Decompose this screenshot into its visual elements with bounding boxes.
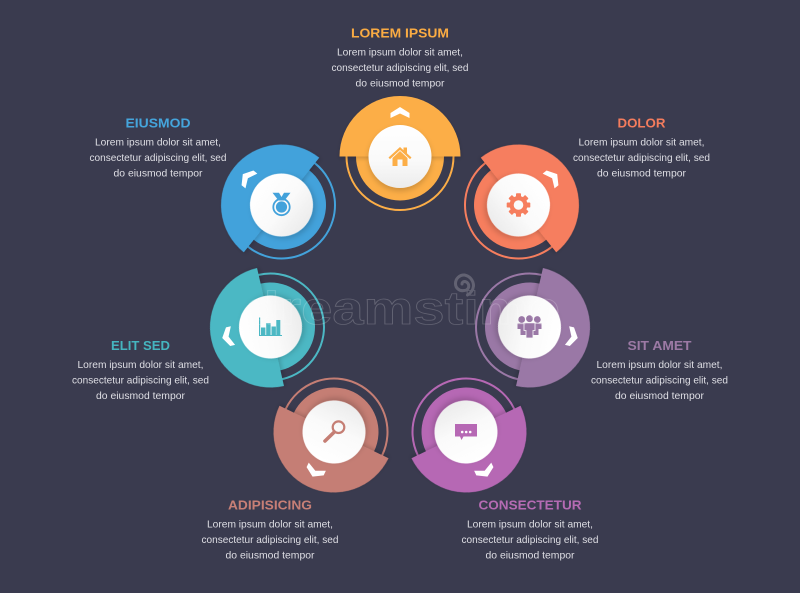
icon: bar chart	[259, 318, 282, 336]
text block: lorem ipsum: Lorem ipsum dolor sit amet,	[337, 47, 463, 59]
icon: watermark spiral	[455, 275, 474, 295]
text block: sit amet: do eiusmod tempor	[615, 390, 704, 402]
heading: adipisicing: ADIPISICING	[228, 498, 312, 512]
text block: elit sed: Lorem ipsum dolor sit amet,	[78, 359, 204, 371]
text block: dolor: do eiusmod tempor	[597, 168, 686, 180]
circle: consectetur	[388, 358, 547, 513]
panel: sit amet	[464, 256, 728, 402]
panel: dolor	[439, 116, 710, 286]
text block: adipisicing: do eiusmod tempor	[226, 550, 315, 562]
watermark text: dreamstime	[245, 282, 560, 334]
circle: dolor	[439, 120, 604, 286]
panel: lorem ipsum	[332, 26, 469, 210]
text block: sit amet: Lorem ipsum dolor sit amet,	[596, 359, 722, 371]
icon: gear	[507, 193, 530, 217]
text block: elit sed: do eiusmod tempor	[96, 390, 185, 402]
heading: eiusmod: EIUSMOD	[126, 116, 190, 130]
circle: adipisicing	[253, 358, 412, 513]
circle: lorem ipsum	[340, 96, 460, 210]
text block: adipisicing: Lorem ipsum dolor sit amet,	[207, 519, 333, 531]
text block: lorem ipsum: consectetur adipiscing elit, sed	[332, 62, 469, 74]
text block: consectetur: consectetur adipiscing elit, sed	[462, 534, 599, 546]
icon: house	[388, 147, 412, 166]
text block: consectetur: Lorem ipsum dolor sit amet,	[467, 519, 593, 531]
watermark	[245, 275, 560, 334]
text block: dolor: consectetur adipiscing elit, sed	[573, 152, 710, 164]
panel: consectetur	[388, 358, 599, 562]
icon: medal	[272, 193, 290, 215]
panel: elit sed	[72, 256, 336, 402]
heading: consectetur: CONSECTETUR	[478, 498, 582, 512]
heading: elit sed: ELIT SED	[111, 338, 170, 353]
text block: lorem ipsum: do eiusmod tempor	[356, 78, 445, 90]
text block: sit amet: consectetur adipiscing elit, sed	[591, 375, 728, 387]
heading: dolor: DOLOR	[618, 116, 666, 130]
text block: consectetur: do eiusmod tempor	[486, 550, 575, 562]
panel: eiusmod	[90, 116, 361, 286]
text block: dolor: Lorem ipsum dolor sit amet,	[578, 137, 704, 149]
text block: eiusmod: consectetur adipiscing elit, sed	[90, 152, 227, 164]
panel: adipisicing	[202, 358, 412, 562]
icon: people	[518, 315, 542, 338]
text block: adipisicing: consectetur adipiscing elit, sed	[202, 534, 339, 546]
circle: sit amet	[464, 256, 602, 399]
circle: eiusmod	[196, 120, 361, 286]
heading: lorem ipsum: LOREM IPSUM	[351, 26, 449, 40]
text block: elit sed: consectetur adipiscing elit, sed	[72, 375, 209, 387]
text block: eiusmod: Lorem ipsum dolor sit amet,	[95, 137, 221, 149]
heading: sit amet: SIT AMET	[628, 338, 692, 353]
icon: magnifier	[325, 421, 344, 441]
circle: elit sed	[198, 256, 336, 399]
text block: eiusmod: do eiusmod tempor	[114, 168, 203, 180]
icon: speech bubble	[455, 424, 477, 440]
